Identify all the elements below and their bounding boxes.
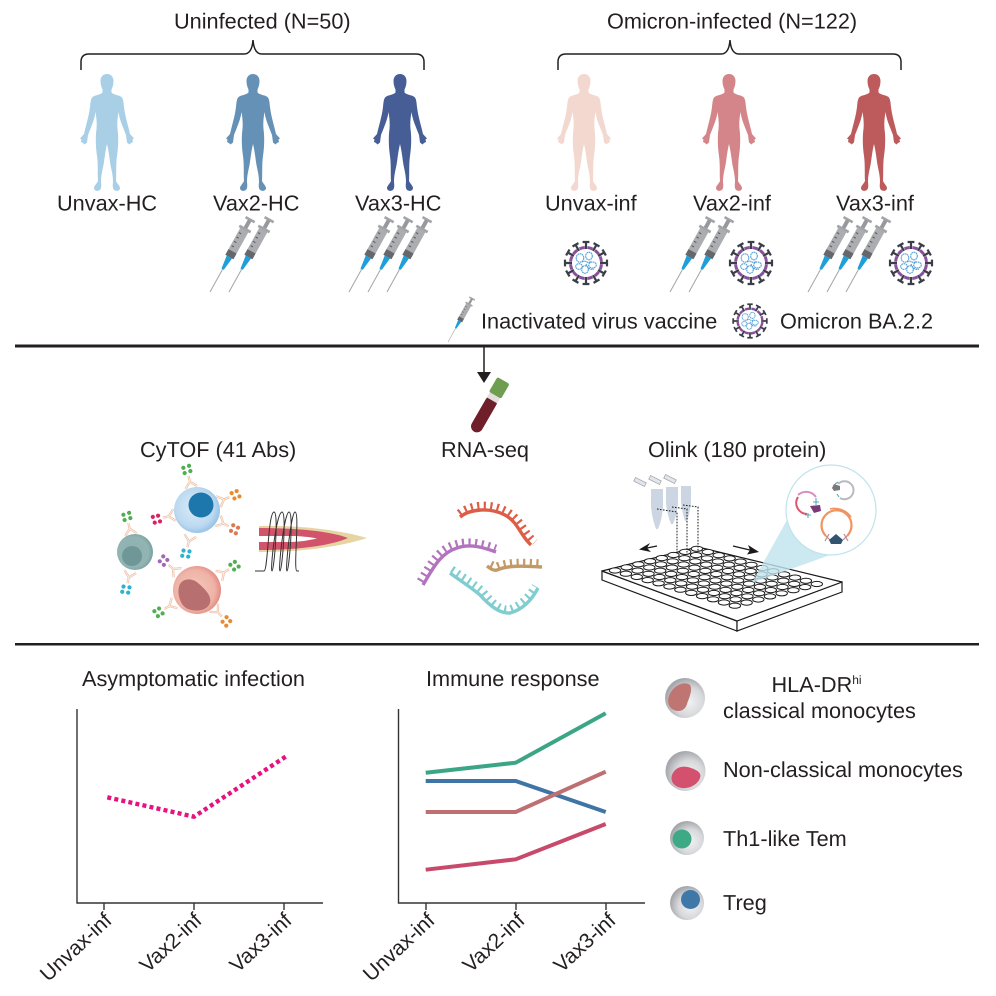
dotted line series [107,756,287,817]
icon: Vax3-HC body [373,74,427,191]
axes [398,709,645,910]
axes [77,709,323,910]
panel: omicron-infected cohort [545,8,932,295]
brace: omicron-infected [558,40,901,70]
icon: blood tube [468,377,510,435]
icon: non-classical monocyte [666,751,706,791]
chart: asymptomatic infection [36,666,323,986]
dotted sample lines [657,505,698,553]
magnifier cone [752,520,830,583]
label: inactivated virus vaccine: Inactivated virus vaccine [481,309,717,334]
line: HLA-DRhi classical monocytes [426,772,606,812]
tick label: Vax2-inf [136,909,207,977]
icon: tubes [634,474,691,529]
icon: virus Unvax-inf [565,242,607,284]
heading: Asymptomatic infection [82,666,305,691]
heading: CyTOF: CyTOF (41 Abs) [140,437,296,462]
label: Vax2-inf: Vax2-inf [693,191,772,216]
panel: RNA-seq [420,437,542,613]
icon: purple RNA strand [420,542,496,585]
tick label: Vax3-inf [550,909,621,977]
icon: Th1-like Tem [670,821,704,855]
legend: vaccine and virus key [445,296,933,344]
tick label: Vax2-inf [459,909,530,977]
label: Vax3-HC: Vax3-HC [355,191,441,216]
label: Th1-like Tem: Th1-like Tem [723,826,847,851]
icon: legend syringe [445,296,476,344]
icon: Vax2-inf body [702,74,756,191]
label: Vax3-inf: Vax3-inf [836,191,915,216]
label: HLA-DRhi: HLA-DR [772,672,852,697]
cell: teal [117,510,153,596]
heading: uninfected: Uninfected (N=50) [174,8,351,34]
icon: legend virus [733,304,767,338]
line: Th1-like Tem [426,713,606,773]
arrow: right [733,545,759,554]
label: Treg: Treg [723,890,767,915]
icon: tan RNA strand [487,562,542,570]
icon: two syringes [664,215,735,295]
icon: virus Vax3-inf [890,242,932,284]
arrow: to blood sample [477,347,491,383]
line: Treg [426,781,606,812]
label: classical monocytes: classical monocytes [723,698,916,723]
heading: omicron-infected: Omicron-infected (N=122) [607,8,857,34]
icon: teal RNA strand [450,569,538,613]
icon: plasma torch and coil [255,512,367,571]
legend: cell types [665,672,963,920]
icon: HLA-DRhi classical monocyte [665,678,705,718]
label: non-classical monocytes: Non-classical monocytes [723,757,963,782]
brace: uninfected [81,40,424,70]
heading: Immune response [426,666,600,691]
label: Vax2-HC: Vax2-HC [213,191,299,216]
label: Unvax-inf: Unvax-inf [545,191,638,216]
icon: red RNA strand [459,505,535,545]
icon: three syringes [802,215,892,295]
panel: uninfected cohort [57,8,441,295]
cell: pink monocyte [151,553,242,629]
icon: well plate [602,546,842,631]
icon: two syringes [204,215,275,295]
chart: immune response [359,666,645,986]
icon: Vax3-inf body [847,74,901,191]
tick label: Unvax-inf [36,909,117,986]
icon: Unvax-inf body [557,74,611,191]
icon: Unvax-HC body [80,74,134,191]
arrow: left [639,543,657,552]
label: Omicron BA.2.2: Omicron BA.2.2 [780,309,933,334]
cell: blue lymphocyte [150,463,243,560]
icon: Vax2-HC body [226,74,280,191]
heading: Olink: Olink (180 protein) [648,437,826,462]
panel: CyTOF [117,437,367,629]
label: HLA-DRhi: hi [852,673,862,687]
panel: Olink [602,437,876,631]
icon: virus Vax2-inf [730,242,772,284]
icon: Treg [670,886,704,920]
heading: RNA-seq: RNA-seq [441,437,529,462]
label: Unvax-HC: Unvax-HC [57,191,157,216]
magnifier: proximity assay detail [786,465,876,555]
tick label: Vax3-inf [226,909,297,977]
icon: three syringes [343,215,433,295]
tick label: Unvax-inf [359,909,440,986]
line: non-classical monocytes [426,824,606,870]
